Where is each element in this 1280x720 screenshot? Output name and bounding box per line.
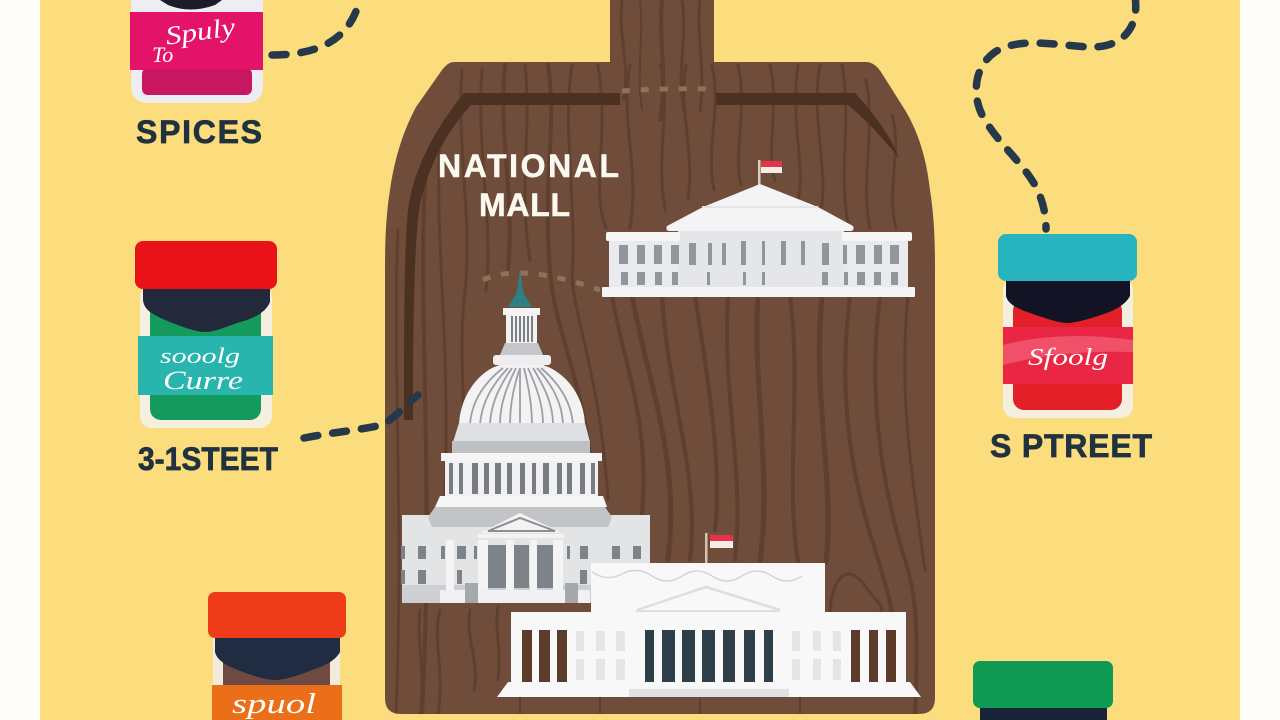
- label: s ptreet: S PTREET: [990, 428, 1152, 464]
- jar: green with teal label and red lid: sooolg: [160, 343, 240, 368]
- dashed route faint on the board handle: [622, 89, 712, 91]
- jar: red with teal lid: [998, 234, 1137, 418]
- jar: green with teal label and red lid: Curre: [163, 366, 243, 395]
- jar: spices pink: Spuly: [164, 12, 237, 51]
- label: 3-1steet: 3-1STEET: [138, 441, 278, 477]
- building: upper museum with flag: [602, 160, 915, 297]
- jar: green with teal label and red lid: [135, 241, 277, 428]
- jar: spices pink: To: [152, 42, 173, 67]
- panel: wooden cutting board: [385, 0, 935, 714]
- label: spices: SPICES: [136, 114, 262, 150]
- jar: red with teal lid: Sfoolg: [1028, 345, 1108, 371]
- dashed route faint to the capitol: [483, 273, 600, 290]
- heading: National Mall: NATIONAL: [438, 148, 619, 184]
- building: capitol dome: [401, 268, 650, 603]
- dashed route from spices jar: [272, 0, 360, 55]
- jar: green lid bottom right: [973, 661, 1113, 720]
- jar: orange lid bottom left: [208, 592, 346, 720]
- dashed route from left jar: [304, 395, 418, 438]
- heading: National Mall: [438, 148, 619, 223]
- jar: orange lid bottom left: spuol: [232, 689, 316, 720]
- building: lower memorial with flag: [497, 533, 921, 697]
- dashed route from street jar at upper right: [976, 0, 1136, 229]
- jar: spices pink: [130, 0, 263, 103]
- heading: National Mall: MALL: [479, 187, 570, 223]
